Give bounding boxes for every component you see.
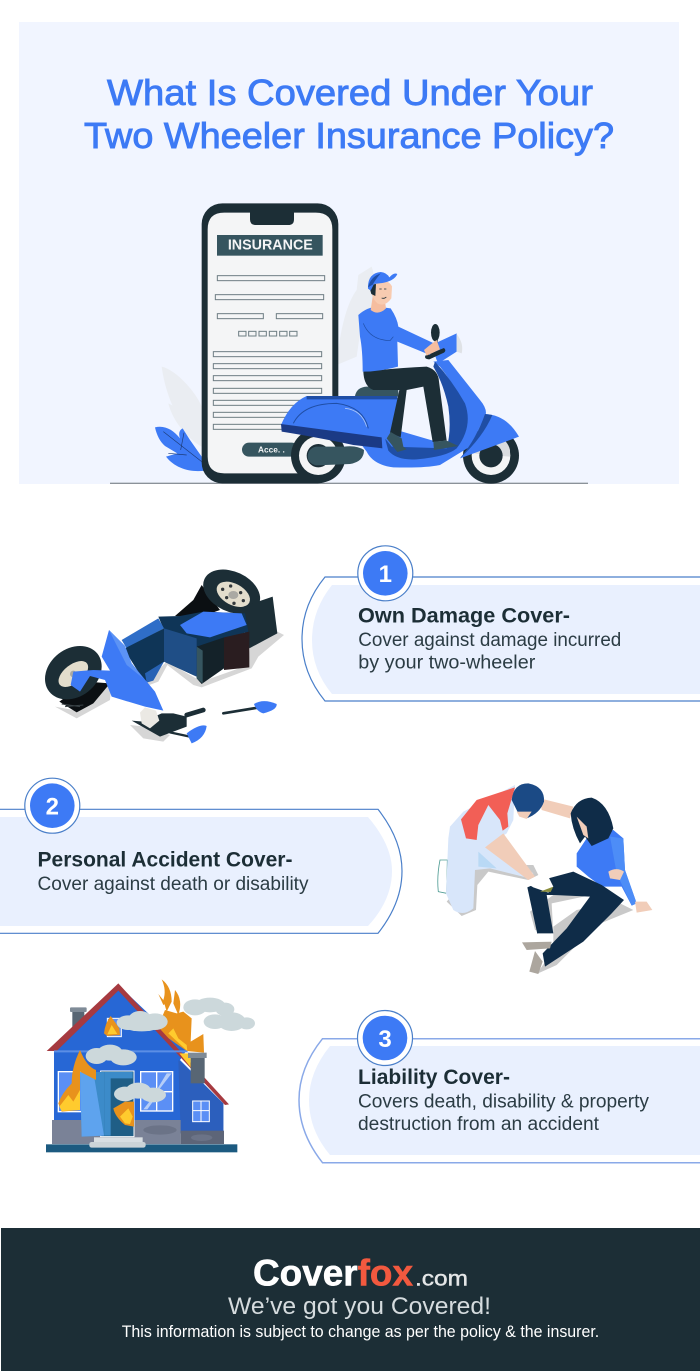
rescuer arm: [478, 805, 503, 847]
shadows: [55, 632, 284, 742]
windows: [58, 1018, 209, 1122]
description: [358, 630, 621, 674]
scooter front wheel: [291, 428, 364, 483]
number badge 3: [358, 1010, 412, 1066]
illustration: phone and scooter rider: [110, 203, 588, 484]
patient hand and foot: [608, 869, 624, 880]
phone: Acce. .: [258, 445, 285, 455]
hand: [424, 340, 440, 356]
roof: [47, 983, 229, 1105]
phone: INSURANCE: [228, 238, 313, 254]
panel: personal accident cover: [0, 778, 402, 933]
icon: background leaves: [162, 267, 375, 447]
broken mirrors: [254, 701, 277, 713]
panel: footer: [1, 1228, 700, 1371]
scooter body: [281, 333, 519, 468]
cap: [368, 272, 397, 291]
pants: [363, 367, 447, 442]
phone: [202, 203, 338, 483]
rescuer back shoe: [438, 860, 447, 893]
stone base: [52, 1120, 224, 1144]
flames behind the roof: [157, 979, 204, 1053]
mid frame: [122, 618, 164, 648]
shadows: [447, 865, 633, 974]
headlight: [140, 707, 159, 728]
number badge 1: 1: [379, 561, 392, 588]
ground slab: [46, 1144, 237, 1152]
chimney right: [179, 1053, 207, 1083]
description: [358, 1091, 649, 1135]
patient hair: [571, 798, 613, 846]
red vest: [461, 787, 515, 840]
patient feet: [522, 942, 552, 950]
title: [84, 72, 614, 156]
doorway: [80, 1071, 134, 1137]
shoes: [387, 432, 407, 452]
number badge 3: 3: [378, 1026, 392, 1053]
insurance heading: [217, 235, 323, 256]
patient legs: [527, 872, 624, 967]
rear wheel: [175, 561, 267, 622]
smoke clouds: [86, 998, 255, 1102]
rider: [358, 272, 458, 452]
description: by your two-wheeler: [358, 652, 536, 674]
heading: Personal Accident Cover-: [38, 849, 292, 872]
description: Cover against death or disability: [38, 874, 309, 895]
panel: own damage cover: [302, 546, 700, 701]
chimney left: [70, 1007, 87, 1032]
accept button: [242, 443, 299, 457]
heading: Liability Cover-: [358, 1066, 510, 1089]
icon: blue leaf: [155, 427, 205, 471]
disclaimer: This information is subject to change as per the policy & the insurer.: [122, 1322, 599, 1341]
scooter seat: [355, 387, 398, 397]
panel: header: [19, 22, 679, 484]
handlebars: [170, 707, 260, 737]
illustration: first aid: [438, 783, 652, 974]
handlebar cluster: [132, 713, 187, 737]
patient arm and body: [577, 830, 637, 906]
flames: [58, 1016, 120, 1112]
steps: [94, 1137, 143, 1142]
seat: [180, 612, 247, 637]
tagline: We’ve got you Covered!: [228, 1293, 491, 1320]
rescuer head: [512, 783, 544, 818]
handlebar and mirror: [425, 324, 445, 359]
description: Cover against damage incurred: [358, 630, 621, 651]
rescuer trousers: [446, 838, 533, 913]
number badge 2: [25, 778, 80, 833]
rescuer torso: [448, 785, 515, 848]
front fender: [71, 630, 163, 711]
form fields: [213, 276, 325, 429]
description: destruction from an accident: [358, 1114, 600, 1135]
number badge 2: 2: [46, 794, 59, 820]
scooter rear wheel: [463, 428, 519, 484]
heading: Own Damage Cover-: [358, 605, 570, 628]
torso: [358, 307, 434, 372]
description: Covers death, disability & property: [358, 1091, 649, 1112]
title: Two Wheeler Insurance Policy?: [84, 115, 614, 156]
ground line: [110, 483, 588, 484]
rescuer arm to patient: [540, 798, 573, 818]
rear lower panels: [197, 637, 224, 684]
illustration: crashed scooter: [34, 561, 284, 743]
bandage: [527, 877, 553, 893]
panel: liability cover: [299, 1010, 700, 1163]
logo: .com: [415, 1268, 468, 1291]
title: What Is Covered Under Your: [107, 72, 593, 113]
neck and face: [371, 297, 386, 313]
number badge 1: [358, 546, 413, 601]
logo: Coverfox: [253, 1253, 413, 1294]
side panel: [164, 628, 197, 677]
front wheel: [34, 635, 112, 712]
illustration: house on fire: [46, 979, 255, 1152]
house walls: [54, 985, 223, 1133]
rear box: [243, 597, 277, 648]
lower step: [89, 1142, 146, 1148]
